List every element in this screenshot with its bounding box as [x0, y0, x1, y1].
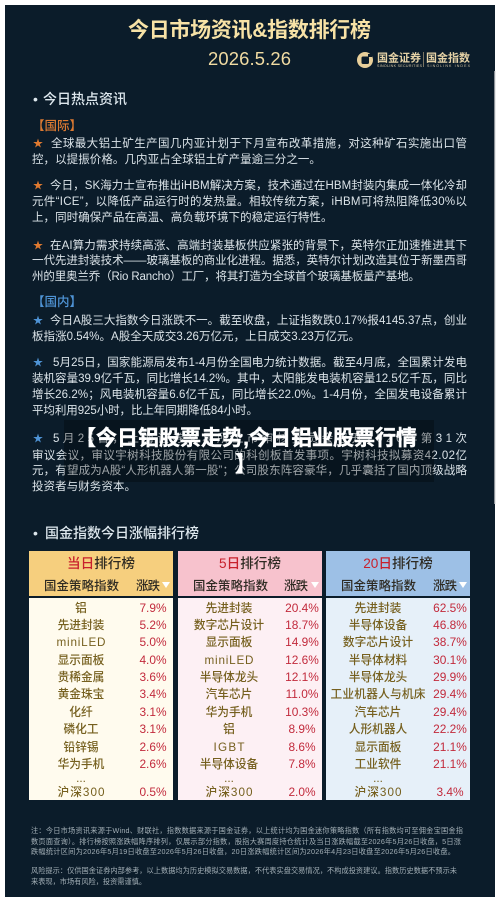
overlay headline: 【今日铝股票走势,今日铝业股票行情: [75, 426, 417, 450]
news item 3: [32, 238, 467, 283]
panel: 5-day ranking: 7.8%: [288, 757, 316, 771]
news item 4: ★: [33, 316, 43, 327]
panel: 5-day ranking: 沪深300: [206, 785, 253, 799]
panel: today ranking: 3.1%: [139, 705, 167, 719]
panel: today ranking: 华为手机: [58, 757, 105, 771]
source note: 数页面查询）。排行榜按照涨跌幅降序排列，仅展示部分指数，股指大赛周度持仓统计及当日涨跌幅截至2026年5月26日收盘，5日涨: [31, 837, 461, 846]
panel: 5-day ranking: 半导体龙头: [200, 670, 259, 684]
panel: 5-day ranking: 20.4%: [285, 601, 319, 615]
panel: today ranking: miniLED: [56, 636, 106, 649]
news item 3: 一代先进封装技术——玻璃基板的商业化进程。据悉，英特尔计划改造其位于新墨西哥: [32, 253, 467, 267]
panel: today ranking: 黄金珠宝: [58, 687, 104, 701]
panel: today ranking: 7.9%: [139, 601, 167, 615]
source note: 注：今日市场资讯来源于Wind、财联社，指数数据来源于国金证券，以上统计均为国金迷你策略指数（所有指数均可至佣金宝国金指: [31, 826, 463, 835]
label: international: 【国际】: [32, 119, 82, 133]
news item 5: 5月25日，国家能源局发布1-4月份全国电力统计数据。截至4月底，全国累计发电: [53, 355, 467, 369]
panel: 5-day ranking: ...: [224, 772, 234, 785]
news item 3: ★: [33, 241, 43, 252]
news item 1: ★: [33, 139, 43, 150]
header: [128, 18, 471, 69]
panel: today ranking: 3.1%: [139, 722, 167, 736]
logo: Sinolink: [357, 50, 471, 68]
panel: 20-day ranking: 半导体龙头: [349, 670, 408, 684]
panel: 5-day ranking: 8.6%: [288, 740, 316, 754]
panel: 20-day ranking: 3.4%: [436, 785, 464, 799]
label: domestic: 【国内】: [32, 294, 82, 309]
date: 2026.5.26: [208, 48, 291, 69]
panel: today ranking: [29, 551, 173, 800]
panel: today ranking: 贵稀金属: [58, 670, 104, 684]
news item 4: [32, 313, 467, 343]
panel: 20-day ranking: 20日排行榜: [363, 555, 433, 571]
panel: today ranking: 铝: [75, 601, 87, 615]
ranking tables: [29, 551, 470, 800]
risk note: 风险提示：仅供国金证券内部参考，以上数据均为历史模拟交易数据，不代表实盘交易情况，不构成投资建议。指数历史数据不预示未: [31, 866, 457, 875]
panel: 20-day ranking: 22.2%: [433, 722, 467, 736]
panel: today ranking: 涨跌: [136, 578, 161, 593]
panel: 5-day ranking: IGBT: [214, 741, 244, 754]
panel: 5-day ranking: 8.9%: [288, 722, 316, 736]
panel: 5-day ranking: 18.7%: [285, 618, 319, 632]
panel: today ranking: 沪深300: [58, 785, 105, 799]
news item 6: [32, 431, 467, 493]
title: 今日市场资讯&指数排行榜: [128, 18, 371, 42]
news item 5: 平均利用925小时，比上年同期降低84小时。: [32, 403, 258, 417]
panel: 5-day ranking: 11.0%: [286, 687, 319, 701]
news item 5: [32, 355, 467, 417]
panel: 20-day ranking: 国金策略指数: [341, 578, 417, 593]
panel: 20-day ranking: [326, 551, 470, 800]
panel: 5-day ranking: 10.3%: [285, 705, 319, 719]
panel: 20-day ranking: 21.1%: [433, 757, 467, 771]
panel: 5-day ranking: 5日排行榜: [219, 555, 281, 571]
panel: 20-day ranking: 先进封装: [355, 601, 402, 615]
panel: 20-day ranking: 工业软件: [355, 757, 402, 771]
panel: today ranking: 3.4%: [139, 687, 167, 701]
news item 6: 元，有望成为A股“人形机器人第一股”；公司股东阵容豪华，几乎囊括了国内顶级战略: [32, 463, 467, 477]
panel: 5-day ranking: miniLED: [204, 654, 254, 667]
panel: 5-day ranking: 华为手机: [206, 705, 253, 719]
panel: 20-day ranking: ...: [373, 772, 383, 785]
panel: 5-day ranking: 数字芯片设计: [194, 618, 264, 632]
panel: today ranking: ...: [76, 772, 86, 785]
panel: 20-day ranking: 沪深300: [354, 785, 402, 799]
news item 1: 控，以提振价格。几内亚占全球铝土矿产量逾三分之一。: [32, 152, 321, 166]
heading: index ranking: 国金指数今日涨幅排行榜: [45, 525, 199, 541]
panel: today ranking: 铅锌锡: [63, 740, 99, 754]
news item 2: 今日，SK海力士宣布推出iHBM解决方案，技术通过在HBM封装内集成一体化冷却: [50, 178, 467, 192]
panel: 5-day ranking: [178, 551, 322, 800]
news item 5: ★: [33, 358, 43, 369]
panel: today ranking: 5.2%: [139, 618, 167, 632]
panel: today ranking: 国金策略指数: [44, 578, 120, 593]
panel: 20-day ranking: 半导体材料: [349, 653, 408, 667]
panel: 5-day ranking: 涨跌: [284, 578, 309, 593]
panel: 20-day ranking: 汽车芯片: [355, 705, 401, 719]
overlay headline: [64, 420, 434, 482]
panel: today ranking: 3.6%: [139, 670, 167, 684]
panel: 5-day ranking: 半导体设备: [200, 757, 259, 771]
news item 1: [32, 136, 467, 166]
panel: 20-day ranking: 29.4%: [433, 705, 467, 719]
panel: today ranking: 0.5%: [139, 785, 167, 799]
panel: 20-day ranking: 涨跌: [433, 578, 458, 593]
panel: 20-day ranking: 62.5%: [433, 601, 467, 615]
panel: 20-day ranking: 30.1%: [433, 653, 467, 667]
panel: today ranking: 先进封装: [58, 618, 105, 632]
news item 2: 元件“ICE”，以降低产品运行时的发热量。相较传统方案，iHBM可将热阻降低30%以: [32, 194, 467, 208]
panel: today ranking: 4.0%: [139, 653, 167, 667]
heading: hot news: •: [33, 91, 38, 107]
overlay headline: 】: [235, 453, 256, 476]
news item 3: 在AI算力需求持续高涨、高端封装基板供应紧张的背景下，英特尔正加速推进其下: [50, 238, 467, 252]
news item 2: [32, 178, 467, 224]
news item 3: 州的里奥兰乔（Rio Rancho）工厂，将其打造为全球首个玻璃基板量产基地。: [32, 269, 420, 283]
panel: today ranking: 5.0%: [139, 635, 167, 649]
news item 2: ★: [33, 181, 43, 192]
panel: today ranking: 当日排行榜: [67, 555, 135, 571]
panel: today ranking: 2.6%: [139, 757, 167, 771]
panel: 5-day ranking: 先进封装: [206, 601, 253, 615]
panel: 20-day ranking: 人形机器人: [349, 723, 408, 736]
panel: 20-day ranking: 显示面板: [355, 740, 402, 754]
news item 6: ★: [33, 434, 43, 445]
footnote: [31, 826, 463, 886]
heading: index ranking: •: [33, 525, 38, 541]
news item 6: 5月25日，上海证券交易所上市审核委员会召开2026年第31次: [53, 431, 467, 445]
news item 4: 今日A股三大指数今日涨跌不一。截至收盘，上证指数跌0.17%报4145.37点，创业: [50, 313, 467, 327]
logo: Sinolink: 国金证券: [377, 50, 421, 64]
panel: 5-day ranking: 14.9%: [285, 635, 319, 649]
logo: Sinolink: 国金指数: [426, 50, 470, 64]
panel: today ranking: 2.6%: [139, 740, 167, 754]
risk note: [31, 866, 457, 886]
news item 5: 装机容量39.9亿千瓦，同比增长14.2%。其中，太阳能发电装机容量12.5亿千瓦，同比: [32, 371, 467, 385]
panel: 20-day ranking: 工业机器人与机床: [330, 687, 426, 701]
panel: 20-day ranking: 半导体设备: [349, 618, 408, 632]
news item 2: 上，同时确保产品在高温、高负载环境下的稳定运行特性。: [32, 210, 333, 224]
panel: 20-day ranking: 38.7%: [433, 635, 467, 649]
panel: today ranking: 化纤: [69, 705, 93, 719]
panel: 5-day ranking: 12.6%: [285, 653, 319, 667]
section: today's hot news: [32, 91, 467, 493]
panel: 20-day ranking: 数字芯片设计: [343, 635, 413, 649]
panel: 5-day ranking: 国金策略指数: [193, 578, 269, 593]
news item 6: 投资者与财务资本。: [32, 479, 136, 493]
logo: Sinolink: SINOLINK INDEX: [427, 64, 471, 68]
panel: today ranking: 磷化工: [63, 722, 99, 736]
panel: 5-day ranking: 汽车芯片: [206, 687, 252, 701]
panel: 5-day ranking: 12.1%: [285, 670, 319, 684]
news item 6: 审议会议，审议宇树科技股份有限公司的科创板首发事项。宇树科技拟募资42.02亿: [32, 448, 467, 462]
panel: 20-day ranking: 46.8%: [433, 618, 467, 632]
panel: 5-day ranking: 显示面板: [206, 635, 253, 649]
logo: Sinolink: SINOLINK SECURITIES: [377, 64, 423, 68]
panel: 5-day ranking: 铝: [223, 722, 235, 736]
source note: [31, 826, 463, 856]
news item 1: 全球最大铝土矿生产国几内亚计划于下月宣布改革措施，对这种矿石实施出口管: [51, 136, 467, 150]
panel: 20-day ranking: 29.9%: [433, 670, 467, 684]
panel: 5-day ranking: 2.0%: [288, 785, 316, 799]
risk note: 来表现，市场有风险，投资需谨慎。: [31, 877, 146, 886]
panel: 20-day ranking: 21.1%: [433, 740, 467, 754]
news item 5: 增长26.2%；风电装机容量6.6亿千瓦，同比增长22.0%。1-4月份，全国发电设备累计: [32, 387, 467, 401]
heading: hot news: 今日热点资讯: [43, 91, 127, 107]
news item 4: 板指涨0.54%。A股全天成交3.26万亿元，上日成交3.23万亿元。: [32, 329, 360, 343]
panel: 20-day ranking: 29.4%: [433, 687, 467, 701]
source note: 跌幅统计区间为2026年5月19日收盘至2026年5月26日收盘，20日涨跌幅统计区间为2026年4月23日收盘至2026年5月26日收盘。: [31, 847, 455, 856]
panel: today ranking: 显示面板: [58, 653, 105, 667]
